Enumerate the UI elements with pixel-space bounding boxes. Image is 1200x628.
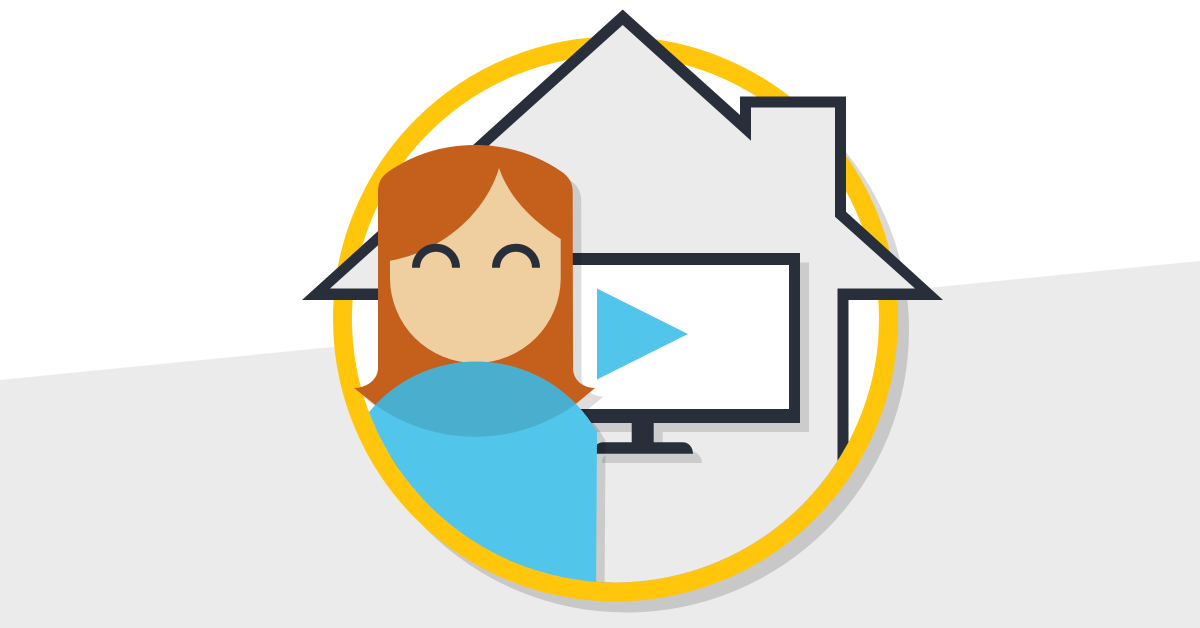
yellow ring [342, 46, 888, 592]
circle shadow [344, 48, 909, 612]
background diagonal band [0, 261, 1200, 628]
hair behind body overlap [375, 362, 576, 437]
woman shadow [362, 180, 606, 582]
hair [354, 145, 595, 437]
left eye [416, 248, 456, 268]
face [390, 168, 561, 363]
television frame [500, 253, 800, 423]
house [302, 10, 943, 628]
body [369, 362, 597, 582]
right eye [496, 248, 536, 268]
television screen [511, 265, 789, 409]
play icon [597, 288, 688, 380]
television shadow [509, 262, 809, 463]
house outline [302, 10, 943, 628]
circle frame [342, 46, 909, 612]
house fill [330, 25, 915, 628]
television stand [593, 422, 693, 454]
television [500, 253, 809, 463]
woman [354, 145, 606, 582]
